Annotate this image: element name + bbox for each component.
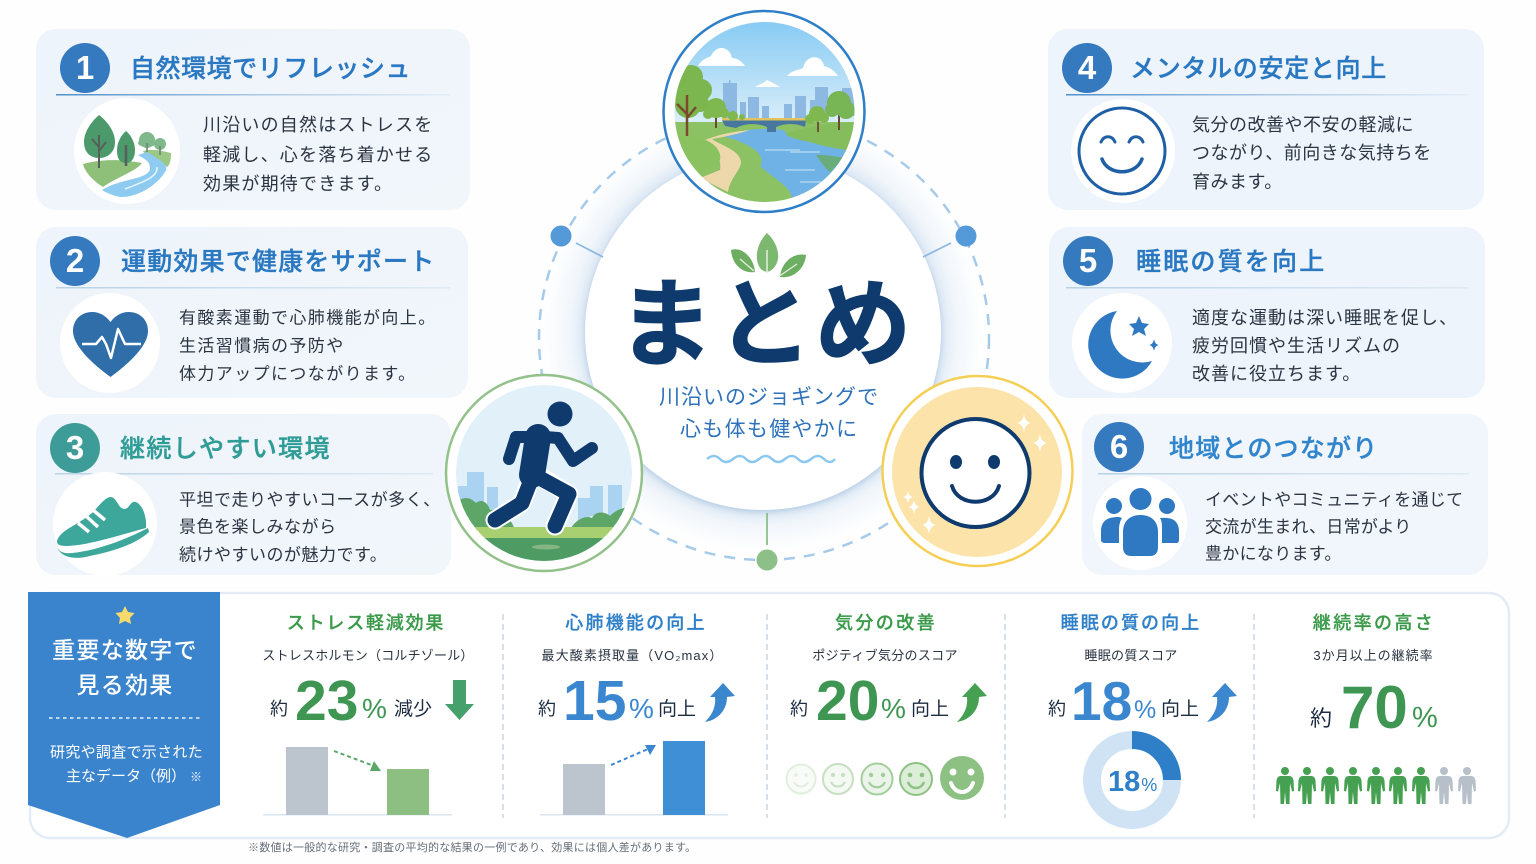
illustration: smiling face (882, 376, 1072, 566)
central ring with dashed orbit (539, 112, 989, 560)
number badge 6: 6 (1110, 428, 1128, 465)
connector dots (550, 226, 976, 571)
stat: 継続率の高さ: 約 (1310, 706, 1332, 731)
number badge 2 (50, 236, 100, 286)
ribbon: heading block (28, 592, 220, 838)
stat: 継続率の高さ: % (1412, 702, 1438, 734)
body text 4: 気分の改善や不安の軽減に (1192, 115, 1414, 135)
number badge 4: 4 (1078, 49, 1097, 86)
body text 6: 豊かになります。 (1205, 544, 1342, 564)
body text 3: 続けやすいのが魅力です。 (179, 546, 387, 564)
panel: 5 睡眠の質を向上 (1049, 227, 1485, 398)
body text 5: 疲労回慣や生活リズムの (1192, 336, 1401, 356)
panel: 4 メンタルの安定と向上 (1048, 29, 1484, 210)
bar chart (263, 747, 452, 816)
panel: 6 地域とのつながり (1082, 414, 1488, 575)
stat: 気分の改善: % (881, 693, 906, 724)
body text 1: 軽減し、心を落ち着かせる (203, 145, 433, 165)
number badge 1 (60, 43, 110, 93)
body text 2: 有酸素運動で心肺機能が向上。 (179, 308, 437, 328)
number badge 5: 5 (1079, 242, 1097, 279)
ribbon: heading block: 見る効果 (76, 672, 174, 698)
stat: 心肺機能の向上: 向上 (658, 698, 696, 720)
panel: key numbers (28, 592, 1509, 838)
body text 4: 育みます。 (1192, 172, 1283, 192)
title: まとめ (618, 272, 914, 379)
stat: 継続率の高さ: 継続率の高さ (1313, 613, 1435, 633)
body text 2: 体力アップにつながります。 (179, 364, 416, 384)
heading 1: 自然環境でリフレッシュ (130, 55, 411, 83)
people icons (1276, 767, 1476, 804)
stat: 心肺機能の向上: % (629, 693, 654, 724)
stat: 気分の改善: ポジティブ気分のスコア (812, 648, 958, 663)
icon: star (116, 606, 134, 624)
wave decoration (707, 456, 835, 462)
number badge 3: 3 (66, 429, 84, 466)
stat: 睡眠の質の向上 (1048, 613, 1237, 820)
number badge 2: 2 (66, 242, 84, 279)
number badge 4 (1062, 43, 1112, 93)
icon: moon and star (1072, 293, 1172, 393)
footnote: ※数値は一般的な研究・調査の平均的な結果の一例であり、効果には個人差があります。 (248, 840, 696, 854)
icon: running shoe (53, 472, 157, 576)
body text 1: 効果が期待できます。 (203, 174, 393, 194)
stat: ストレス軽減効果: 約 (270, 699, 288, 719)
panel: 1 自然環境でリフレッシュ (36, 29, 470, 210)
heading 4: メンタルの安定と向上 (1130, 55, 1387, 83)
icon: smile (1071, 99, 1175, 203)
stat: 気分の改善: 気分の改善 (835, 613, 937, 633)
stat: 心肺機能の向上: 15 (563, 669, 626, 733)
body text 3 (179, 490, 441, 564)
body text 3: 平坦で走りやすいコースが多く、 (179, 490, 441, 510)
stat: 心肺機能の向上: 約 (538, 699, 556, 719)
stat: ストレス軽減効果: % (362, 693, 387, 724)
illustration: river landscape (664, 11, 864, 212)
stat: 気分の改善: 約 (790, 699, 808, 719)
arrow up (957, 683, 987, 722)
ribbon: heading block: 研究や調査で示された (50, 744, 203, 761)
face scale (786, 756, 984, 800)
arrow down (445, 680, 474, 720)
icon: leaves (731, 233, 806, 277)
stat: 心肺機能の向上: 最大酸素摂取量（VO₂max） (542, 648, 723, 663)
stat: 気分の改善 (786, 613, 987, 800)
heading 5: 睡眠の質を向上 (1136, 248, 1326, 276)
stat: ストレス軽減効果: ストレスホルモン（コルチゾール） (262, 648, 474, 663)
body text 4: つながり、前向きな気持ちを (1192, 143, 1432, 163)
ribbon: heading block: 重要な数字で (52, 637, 198, 663)
body text 1 (203, 115, 433, 194)
stat: ストレス軽減効果: ストレス軽減効果 (287, 613, 445, 633)
number badge 3 (50, 423, 100, 473)
icon: trees and river (74, 98, 180, 204)
stat: 気分の改善: 向上 (911, 698, 949, 720)
heading 6: 地域とのつながり (1169, 435, 1378, 463)
number badge 1: 1 (76, 49, 94, 86)
subtitle: 心も体も健やかに (680, 418, 858, 441)
stat: 睡眠の質の向上: % (1134, 696, 1156, 724)
stat: 睡眠の質の向上: 睡眠の質スコア (1084, 648, 1178, 663)
body text 1: 川沿いの自然はストレスを (203, 115, 433, 135)
body text 5: 改善に役立ちます。 (1192, 364, 1361, 384)
ribbon: heading block: 主なデータ（例） ※ (66, 767, 202, 785)
body text 2: 生活習慣病の予防や (179, 336, 345, 356)
stat: 睡眠の質の向上: 約 (1048, 699, 1066, 719)
stat: 睡眠の質の向上: 向上 (1161, 698, 1199, 720)
heading 3: 継続しやすい環境 (120, 435, 331, 463)
donut chart: 18% (1108, 766, 1157, 798)
panel: 3 継続しやすい環境 (36, 414, 451, 576)
body text 5 (1192, 308, 1458, 384)
number badge 5 (1063, 236, 1113, 286)
body text 6: イベントやコミュニティを通じて (1205, 490, 1463, 510)
number badge 6 (1094, 422, 1144, 472)
stat: 心肺機能の向上 (538, 613, 735, 816)
panel: 2 運動効果で健康をサポート (36, 227, 468, 398)
bar chart (540, 741, 728, 816)
stat: ストレス軽減効果 (262, 613, 474, 816)
illustration: runner (446, 375, 642, 571)
stat: 継続率の高さ (1276, 613, 1476, 804)
stat: 睡眠の質の向上: 睡眠の質の向上 (1061, 613, 1201, 633)
stat: 継続率の高さ: 70 (1341, 674, 1408, 741)
icon: people (1093, 476, 1187, 570)
stat: 睡眠の質の向上: 18 (1071, 670, 1132, 732)
arrow up (705, 683, 735, 722)
stat: ストレス軽減効果: 23 (295, 669, 358, 733)
stat: 継続率の高さ: 3か月以上の継続率 (1313, 648, 1434, 663)
heading 2: 運動効果で健康をサポート (121, 248, 435, 276)
stat: ストレス軽減効果: 減少 (394, 698, 432, 720)
icon: heart with pulse (60, 293, 160, 393)
runner figure (495, 402, 592, 526)
center circle (585, 154, 941, 510)
body text 6 (1205, 490, 1463, 564)
subtitle (659, 386, 879, 441)
arrow up (1207, 683, 1237, 722)
body text 6: 交流が生まれ、日常がより (1205, 518, 1412, 536)
stat: 気分の改善: 20 (816, 669, 879, 733)
stat: 心肺機能の向上: 心肺機能の向上 (565, 613, 707, 633)
body text 4 (1192, 115, 1432, 192)
body text 5: 適度な運動は深い睡眠を促し、 (1192, 308, 1458, 328)
body text 3: 景色を楽しみながら (179, 518, 336, 536)
body text 2 (179, 308, 437, 384)
subtitle: 川沿いのジョギングで (659, 386, 879, 409)
donut chart (1092, 740, 1172, 820)
